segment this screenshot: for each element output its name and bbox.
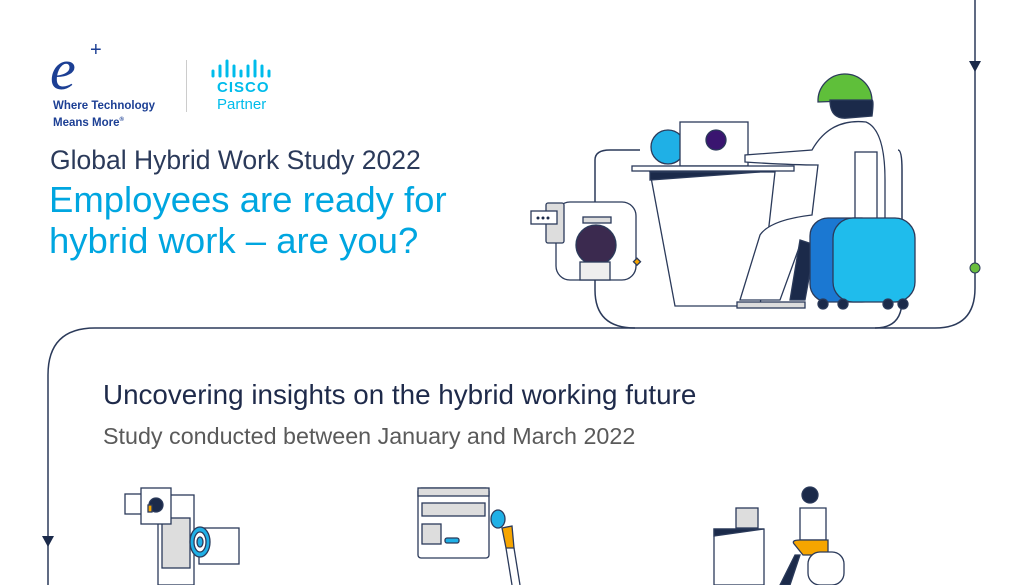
headline xyxy=(49,179,447,261)
illustration: phone with target xyxy=(125,488,239,585)
logo: e+: e xyxy=(50,37,76,102)
dot: green xyxy=(970,263,980,273)
logo: e+: Means More® xyxy=(53,117,124,129)
logo: cisco partner: CISCO xyxy=(217,79,270,96)
subtitle: Global Hybrid Work Study 2022 xyxy=(50,145,421,175)
logo: e+: Where Technology xyxy=(53,100,155,112)
logo: e+ xyxy=(50,37,155,129)
illustration: person at desk with luggage xyxy=(531,74,915,309)
illustration: person on stool at laptop xyxy=(714,487,844,585)
illustration: browser window with person xyxy=(418,488,520,585)
logo: e+: + xyxy=(90,39,102,61)
section subheading: Study conducted between January and March 2022 xyxy=(103,423,635,449)
arrow: top right xyxy=(969,61,981,72)
headline: hybrid work – are you? xyxy=(49,220,418,261)
logo: cisco partner xyxy=(212,60,270,113)
arrow: left xyxy=(42,536,54,547)
logo: cisco partner: Partner xyxy=(217,96,266,113)
headline: Employees are ready for xyxy=(49,179,447,220)
section heading: Uncovering insights on the hybrid working future xyxy=(103,379,696,410)
